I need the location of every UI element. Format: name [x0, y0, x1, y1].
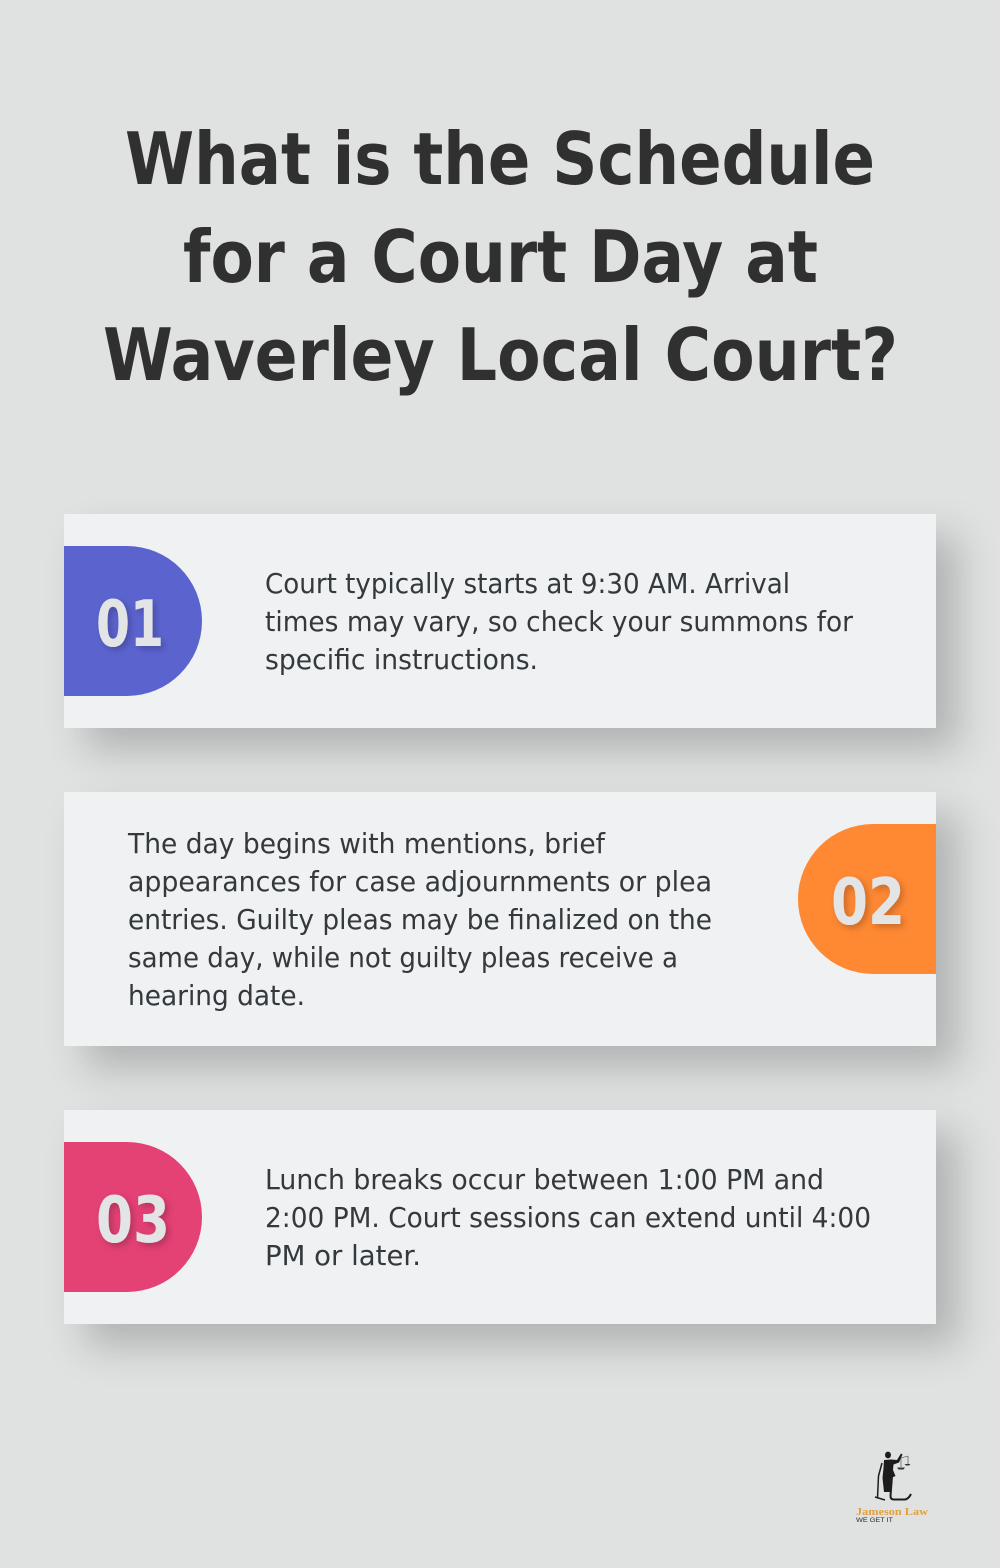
text: step 02 description: entries. Guilty pleas may be finalized on the	[128, 904, 712, 936]
title: Waverley Local Court?	[103, 313, 898, 397]
title	[103, 117, 898, 397]
logo: Jameson Law	[856, 1452, 928, 1524]
text: step 03 description: 2:00 PM. Court sessions can extend until 4:00	[265, 1202, 871, 1234]
text: step 01 description: Court typically starts at 9:30 AM. Arrival	[265, 568, 790, 600]
text: step 01 description	[265, 568, 854, 676]
badge: 02	[798, 824, 936, 974]
badge: 01: 01	[96, 588, 164, 662]
title: What is the Schedule	[125, 117, 875, 201]
panel: step 02	[64, 792, 936, 1046]
text: step 02 description: The day begins with mentions, brief	[127, 828, 606, 860]
panel: step 03	[64, 1110, 936, 1324]
text: step 03 description: PM or later.	[265, 1240, 421, 1272]
title: for a Court Day at	[183, 215, 818, 299]
text: step 01 description: specific instructions.	[265, 644, 538, 676]
badge: 02: 02	[831, 866, 905, 940]
text: step 01 description: times may vary, so check your summons for	[265, 606, 854, 638]
text: step 03 description	[265, 1164, 871, 1272]
text: step 03 description: Lunch breaks occur between 1:00 PM and	[265, 1164, 824, 1196]
icon: lady justice with scales	[875, 1452, 911, 1500]
panel: step 01	[64, 514, 936, 728]
badge: 03	[64, 1142, 202, 1292]
text: step 02 description: same day, while not guilty pleas receive a	[128, 942, 678, 974]
text: step 02 description: hearing date.	[128, 980, 305, 1012]
text: WE GET IT: WE GET IT	[856, 1517, 893, 1524]
badge: 03: 03	[96, 1184, 170, 1258]
badge: 01	[64, 546, 202, 696]
text: Jameson Law: Jameson Law	[856, 1507, 928, 1518]
text: step 02 description: appearances for case adjournments or plea	[128, 866, 712, 898]
text: step 02 description	[127, 828, 712, 1012]
